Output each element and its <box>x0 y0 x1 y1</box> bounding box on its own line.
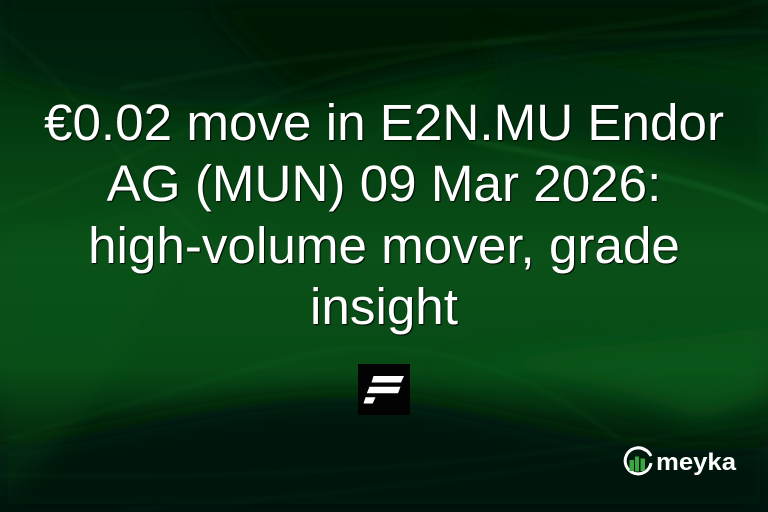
title: insight <box>310 278 458 335</box>
icon: meyka ring with bars <box>625 448 651 474</box>
wordmark: meyka <box>656 449 737 476</box>
icon: company logo chip <box>358 364 410 415</box>
title: €0.02 move in E2N.MU Endor <box>44 94 724 151</box>
title: AG (MUN) 09 Mar 2026: <box>107 155 661 212</box>
title: high-volume mover, grade <box>88 217 680 274</box>
title <box>44 94 724 336</box>
logo: meyka <box>624 446 737 476</box>
